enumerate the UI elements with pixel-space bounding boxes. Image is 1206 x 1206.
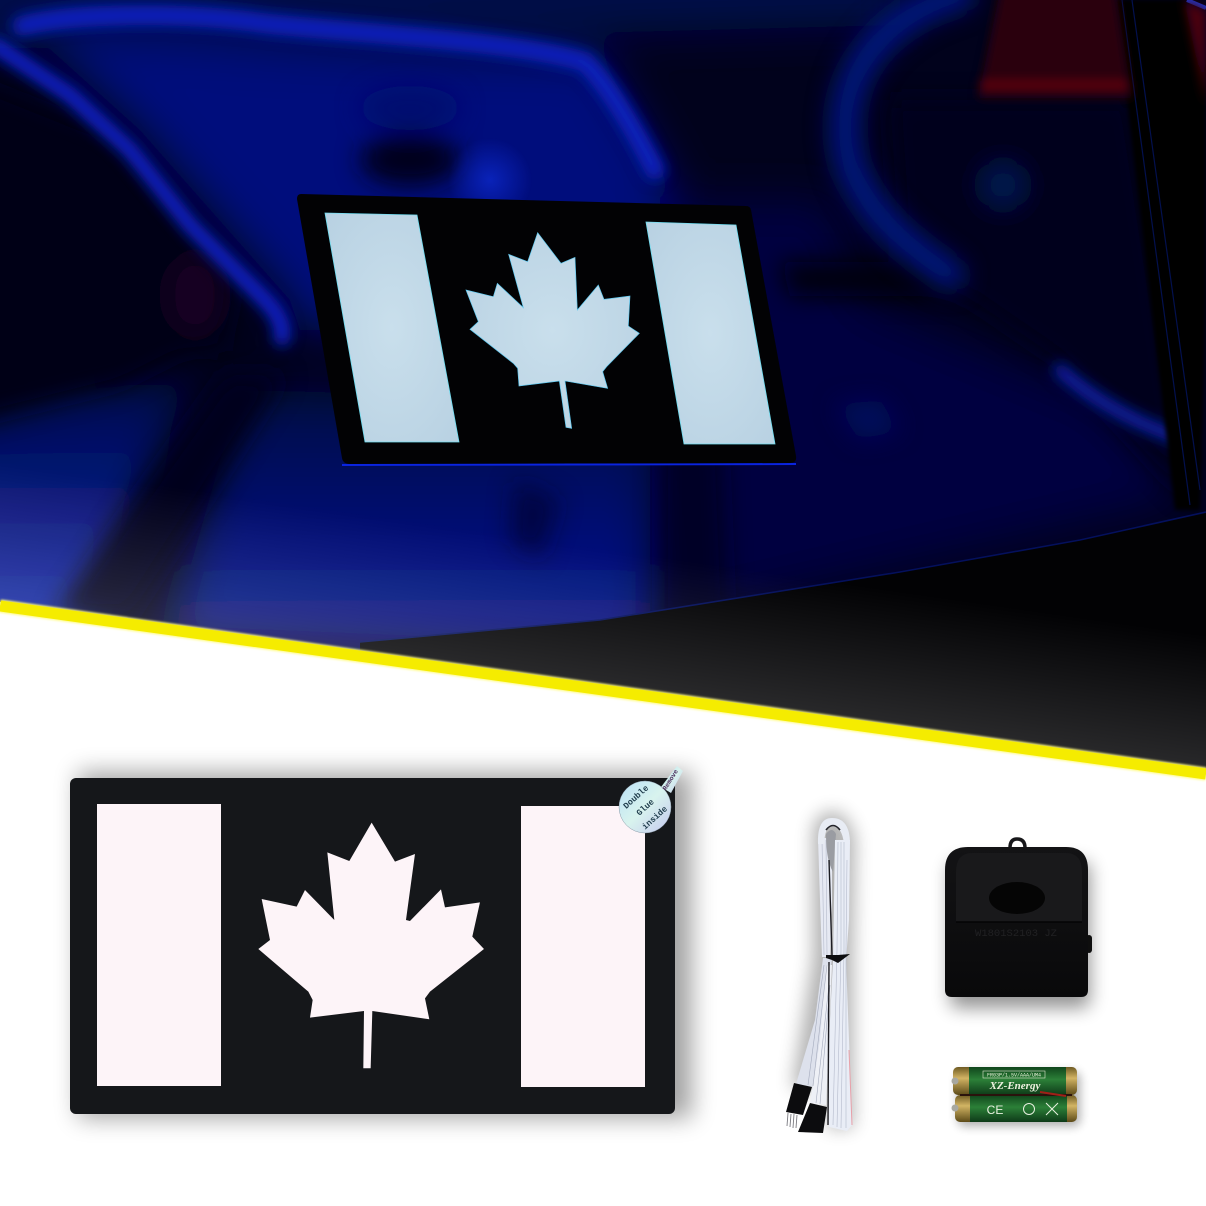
- connectors: [786, 1083, 812, 1115]
- cable tie: [826, 954, 850, 963]
- sticker: double glue inside: inside: [640, 804, 670, 832]
- sticker: double glue inside: [619, 766, 683, 833]
- left band of loop: [818, 838, 832, 957]
- installed glowing flag panel: [297, 194, 796, 465]
- top battery: [952, 1067, 1077, 1095]
- dark wedge under door trim: [0, 98, 224, 364]
- flag panel product: [70, 766, 692, 1118]
- sticker: double glue inside: Remove: [662, 768, 680, 792]
- hanging loop: [1010, 839, 1025, 848]
- moulded code: W1801S2103 JZ: [975, 928, 1057, 940]
- lit maple leaf: [466, 233, 639, 428]
- top battery: XZ-Energy: [989, 1080, 1040, 1092]
- main right band: [829, 840, 852, 1131]
- photo: car interior at night with blue glow: [0, 0, 1206, 790]
- left strands: [796, 958, 832, 1088]
- oval button: [989, 882, 1045, 914]
- sticker: double glue inside: Double: [622, 783, 651, 811]
- left lit bar: [325, 213, 459, 442]
- ribbon cable: [786, 818, 852, 1133]
- black door pillar: [1115, 0, 1206, 510]
- side switch: [1086, 935, 1092, 953]
- battery controller box: [945, 839, 1092, 1008]
- red tail light: [978, 0, 1206, 105]
- yellow glow strip divider: [0, 606, 1206, 774]
- loop top: [818, 818, 850, 844]
- two AAA batteries: [952, 1067, 1080, 1126]
- right lit bar: [646, 222, 775, 444]
- haze fading toward divider: [0, 494, 1206, 768]
- bottom battery: CE: [987, 1103, 1003, 1117]
- sticker: double glue inside: Glue: [635, 797, 657, 818]
- left white bar: [97, 804, 221, 1086]
- white maple leaf: [258, 823, 484, 1068]
- black door sill wedge: [360, 512, 1206, 790]
- right white bar: [521, 806, 645, 1087]
- blue highlights on the trim: [0, 0, 1185, 440]
- top battery: FR03P/1.5V/AAA/UM4: [987, 1072, 1041, 1078]
